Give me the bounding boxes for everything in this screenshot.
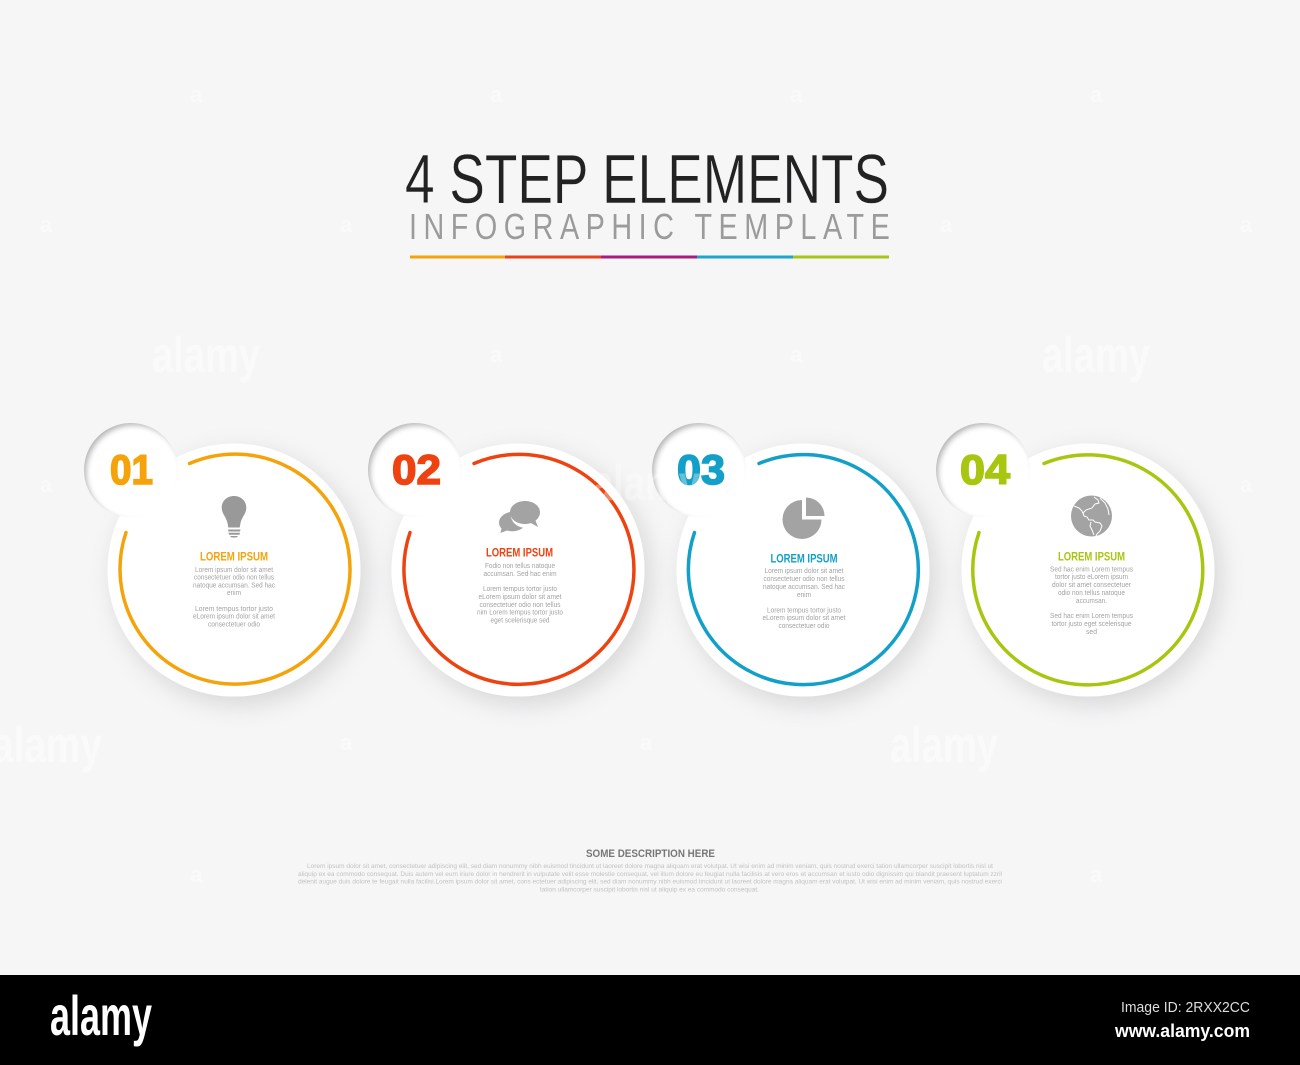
body text 1 (193, 567, 275, 628)
body text 2: eget scelerisque sed (490, 618, 550, 624)
watermarks: a (1090, 82, 1103, 107)
body text 2: Fodio non tellus natoque (485, 563, 555, 570)
icon: pie chart (782, 498, 825, 539)
progress ring 3 (688, 455, 918, 685)
footer description: Lorem ipsum dolor sit amet, consectetuer adipiscing elit, sed diam nonummy nibh euismod tincidunt ut laoreet dolore magna aliquam erat volutpat. Ut wisi enim ad minim veniam, quis nostrud exerci tation ullamcorper suscipit lobortis nisl ut (307, 863, 993, 870)
body text 2: accumsan. Sed hac enim (484, 571, 557, 578)
body text 1: natoque accumsan. Sed hac (193, 582, 275, 590)
body text 1: consectetuer odio (208, 622, 260, 628)
heading 2: LOREM IPSUM (486, 546, 553, 560)
disc 4 (962, 444, 1214, 696)
watermarks: a (1240, 472, 1253, 497)
body text 4: Sed hac enim Lorem tempus (1050, 566, 1133, 574)
body text 3: natoque accumsan. Sed hac (763, 584, 845, 591)
watermarks: alamy (890, 717, 998, 773)
watermarks: a (790, 342, 803, 367)
body text 3: consectetuer odio non tellus (764, 576, 845, 583)
body text 2: consectetuer odio non tellus (480, 602, 561, 609)
panel: step 2 (344, 400, 644, 696)
watermarks: a (40, 472, 53, 497)
disc 1 (108, 444, 360, 696)
watermarks: a (1240, 212, 1253, 237)
progress ring 4 (973, 455, 1203, 685)
footer logo: alamy (50, 984, 152, 1047)
watermarks: a (340, 212, 353, 237)
number 02: 02 (392, 446, 441, 493)
body text 3: enim (797, 592, 811, 599)
body text 2: Lorem tempus tortor justo (483, 586, 557, 593)
number 03: 03 (677, 446, 725, 493)
centre watermark over panels: alamy (592, 455, 700, 511)
footer description: aliquip ex ea commodo consequat. Duis autem vel eum iriure dolor in hendrerit in vulputate velit esse molestie consequat, vel illum dolore eu feugiat nulla facilisis at vero eros et accumsan et iusto odio dignissim qui blandit praesent luptatum zzril (298, 871, 1003, 878)
footer description: tation ullamcorper suscipit lobortis nisl ut aliquip ex ea commodo consequat. (540, 886, 759, 894)
body text 4: dolor sit amet consectetuer (1052, 582, 1132, 589)
body text 1: eLorem ipsum dolor sit amet (193, 614, 275, 620)
multicolour title underline (410, 256, 889, 258)
heading 3: LOREM IPSUM (770, 552, 838, 566)
website: www.alamy.com (1114, 1021, 1250, 1041)
image id: Image ID: 2RXX2CC (1121, 999, 1250, 1016)
body text 4: tortor justo eget scelerisque (1052, 621, 1132, 628)
body text 4: tortor justo eLorem ipsum (1055, 574, 1128, 581)
watermarks: a (790, 82, 803, 107)
watermarks: a (640, 730, 653, 755)
disc 3 (676, 444, 930, 696)
body text 4: accumsan. (1076, 598, 1107, 605)
body text 2: eLorem ipsum dolor sit amet (478, 594, 562, 601)
watermarks: a (1090, 862, 1103, 887)
watermarks: alamy (152, 327, 260, 383)
footer description: delenit augue duis dolore te feugait nulla facilisi.Lorem ipsum dolor sit amet, cons ectetuer adipiscing elit, sed diam nonummy nibh euismod tincidunt ut laoreet dolore magna aliquam erat volutpat. Ut wisi enim ad minim veniam, quis nostrud exerci (298, 878, 1002, 886)
number notch 3 (652, 423, 744, 515)
panel: step 3 (628, 400, 930, 696)
body text 4 (1050, 566, 1133, 636)
icon: light bulb (222, 496, 246, 538)
body text 4: sed (1086, 629, 1097, 636)
watermarks: a (490, 862, 503, 887)
body text 3 (762, 568, 846, 630)
watermarks (0, 82, 1253, 887)
body text 4: odio non tellus natoque (1058, 590, 1125, 597)
watermarks: a (190, 82, 203, 107)
watermarks: a (490, 82, 503, 107)
body text 1: Lorem tempus tortor justo (195, 606, 273, 613)
body text 3: Lorem tempus tortor justo (767, 608, 841, 614)
disc 2 (392, 444, 644, 696)
body text 4: Sed hac enim Lorem tempus (1050, 613, 1133, 620)
number notch 4 (936, 423, 1028, 516)
watermarks: a (40, 212, 53, 237)
number notch 2 (368, 423, 460, 515)
number 04: 04 (960, 446, 1011, 493)
footer description (298, 863, 1003, 894)
title: 4 STEP ELEMENTS (405, 140, 889, 218)
body text 3: Lorem ipsum dolor sit amet (764, 568, 844, 575)
progress ring 1 (120, 454, 350, 684)
stock photo footer band (0, 975, 1300, 1065)
body text 3: consectetuer odio (778, 623, 830, 630)
watermarks: a (940, 212, 953, 237)
icon: globe (1071, 496, 1112, 538)
number 01: 01 (110, 446, 153, 493)
watermarks: a (490, 342, 503, 367)
footer heading: SOME DESCRIPTION HERE (586, 848, 715, 860)
panel: step 1 (60, 400, 360, 696)
watermarks: a (340, 730, 353, 755)
watermarks: a (790, 862, 803, 887)
progress ring 2 (404, 454, 634, 684)
body text 1: Lorem ipsum dolor sit amet (195, 567, 273, 574)
body text 2 (477, 563, 563, 624)
heading 4: LOREM IPSUM (1058, 550, 1125, 564)
body text 3: eLorem ipsum dolor sit amet (762, 615, 846, 622)
body text 1: enim (227, 590, 241, 597)
panel: step 4 (912, 400, 1214, 696)
body text 1: consectetuer odio non tellus (194, 574, 274, 582)
watermarks: a (190, 862, 203, 887)
number notch 1 (84, 423, 176, 515)
heading 1: LOREM IPSUM (200, 550, 268, 564)
body text 2: nim Lorem tempus tortor justo (477, 610, 563, 616)
watermarks: alamy (1042, 327, 1150, 383)
subtitle: INFOGRAPHIC TEMPLATE (409, 206, 890, 247)
icon: speech bubbles (499, 501, 540, 533)
